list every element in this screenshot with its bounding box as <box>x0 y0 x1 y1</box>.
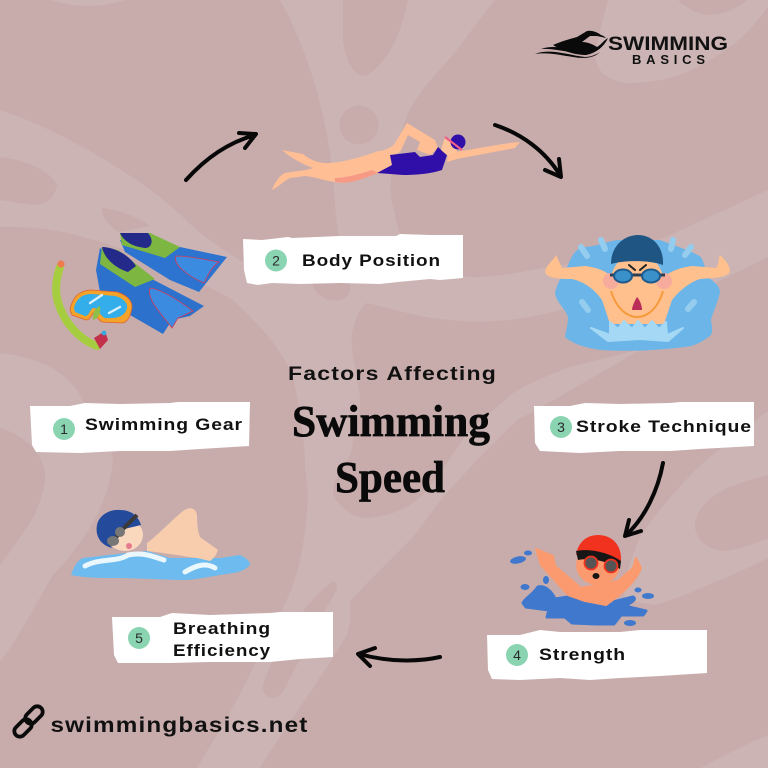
label: breathing efficiency <box>112 612 333 663</box>
logo wordmark: SWIMMING <box>608 34 728 55</box>
mask <box>70 290 132 323</box>
water <box>555 240 720 351</box>
snorkel <box>56 267 97 346</box>
title <box>288 364 497 502</box>
illustration: swimmer with red cap <box>509 535 654 626</box>
illustration: swimmer with blue cap <box>71 508 250 580</box>
goggles <box>110 515 137 545</box>
swimsuit <box>377 147 447 175</box>
label: breathing efficiency: Efficiency <box>173 641 271 660</box>
badge 3: 3 <box>557 419 565 435</box>
title line 3: Speed <box>335 453 445 502</box>
website url: swimmingbasics.net <box>50 714 308 737</box>
water <box>71 551 250 580</box>
badge 2: 2 <box>272 252 280 268</box>
goggles <box>610 274 665 276</box>
icon: swimmer logo mark <box>535 31 608 58</box>
logo subline: BASICS <box>632 52 705 67</box>
badge 5 <box>128 627 150 649</box>
badge 4: 4 <box>513 647 521 663</box>
mouth <box>632 297 642 310</box>
badge 4 <box>506 644 528 666</box>
arrow: body position to stroke technique <box>495 125 561 177</box>
label: swimming gear <box>30 402 250 453</box>
arrow: stroke technique to strength <box>625 463 663 536</box>
back fin <box>120 240 227 292</box>
splash <box>591 321 683 341</box>
legs and torso <box>272 150 392 190</box>
badge 1 <box>53 418 75 440</box>
illustration: butterfly swimmer <box>545 235 730 351</box>
label: stroke technique: Stroke Technique <box>576 417 752 436</box>
front fin <box>96 248 204 334</box>
label: swimming gear: Swimming Gear <box>85 415 243 434</box>
splash <box>523 587 646 624</box>
arm and body <box>147 508 218 561</box>
title line 2: Swimming <box>292 397 490 446</box>
badge 2 <box>265 250 287 272</box>
head <box>576 545 620 585</box>
arms and torso <box>536 549 641 605</box>
badge 5: 5 <box>135 630 143 646</box>
title line 1: Factors Affecting <box>288 364 497 385</box>
head <box>441 137 457 156</box>
label: body position <box>243 234 463 285</box>
extended arm <box>447 142 520 162</box>
illustration: freestyle swimmer <box>272 123 520 190</box>
head <box>107 519 143 551</box>
label: stroke technique <box>534 402 754 453</box>
icon: link <box>12 704 45 739</box>
badge 1: 1 <box>60 421 68 437</box>
raised arm <box>377 123 438 156</box>
logo: Swimming Basics <box>535 31 728 67</box>
label: body position: Body Position <box>302 251 441 270</box>
label: strength <box>487 630 707 680</box>
arrow: gear to body position <box>186 133 256 180</box>
arms and body <box>545 255 730 324</box>
head <box>610 253 664 317</box>
illustration: fins, mask and snorkel <box>56 233 227 349</box>
label: strength: Strength <box>539 645 626 664</box>
arrow: strength to breathing efficiency <box>358 648 440 666</box>
label: breathing efficiency: Breathing <box>173 619 271 638</box>
badge 3 <box>550 416 572 438</box>
sunglasses <box>584 556 598 570</box>
cap and goggles <box>450 134 466 150</box>
